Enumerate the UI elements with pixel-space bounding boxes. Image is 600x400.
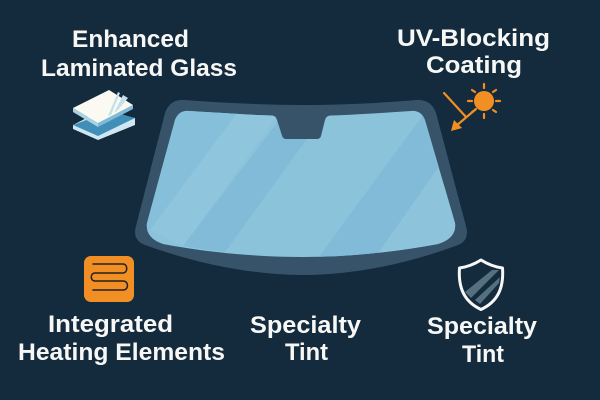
- windshield frame: [135, 100, 467, 275]
- label: Enhanced Laminated Glass: Laminated Glass: [41, 55, 237, 82]
- label: Specialty Tint (right): Tint: [462, 341, 504, 368]
- windshield glass: [146, 110, 456, 257]
- label: Enhanced Laminated Glass: [41, 26, 237, 82]
- icon: laminated glass layers: [73, 90, 135, 140]
- label: Specialty Tint (right): [427, 313, 537, 368]
- label: Specialty Tint (centre): [250, 312, 361, 366]
- label: Integrated Heating Elements: Integrated: [48, 311, 173, 338]
- icon: shield: [459, 260, 503, 310]
- icon: sun with deflected ray: [444, 84, 500, 131]
- label: Enhanced Laminated Glass: Enhanced: [72, 26, 189, 53]
- label: Integrated Heating Elements: Heating Elements: [18, 339, 225, 366]
- label: Specialty Tint (centre): Tint: [285, 339, 328, 366]
- label: Specialty Tint (centre): Specialty: [250, 312, 361, 339]
- label: Integrated Heating Elements: [18, 311, 225, 366]
- label: UV-Blocking Coating: Coating: [426, 52, 522, 79]
- infographic canvas: [20, 28, 548, 365]
- glass reflection bands: [146, 110, 236, 232]
- label: UV-Blocking Coating: [397, 25, 550, 79]
- label: UV-Blocking Coating: UV-Blocking: [397, 25, 550, 52]
- windshield: [130, 100, 470, 275]
- label: Specialty Tint (right): Specialty: [427, 313, 537, 340]
- icon: heating element: [84, 256, 134, 302]
